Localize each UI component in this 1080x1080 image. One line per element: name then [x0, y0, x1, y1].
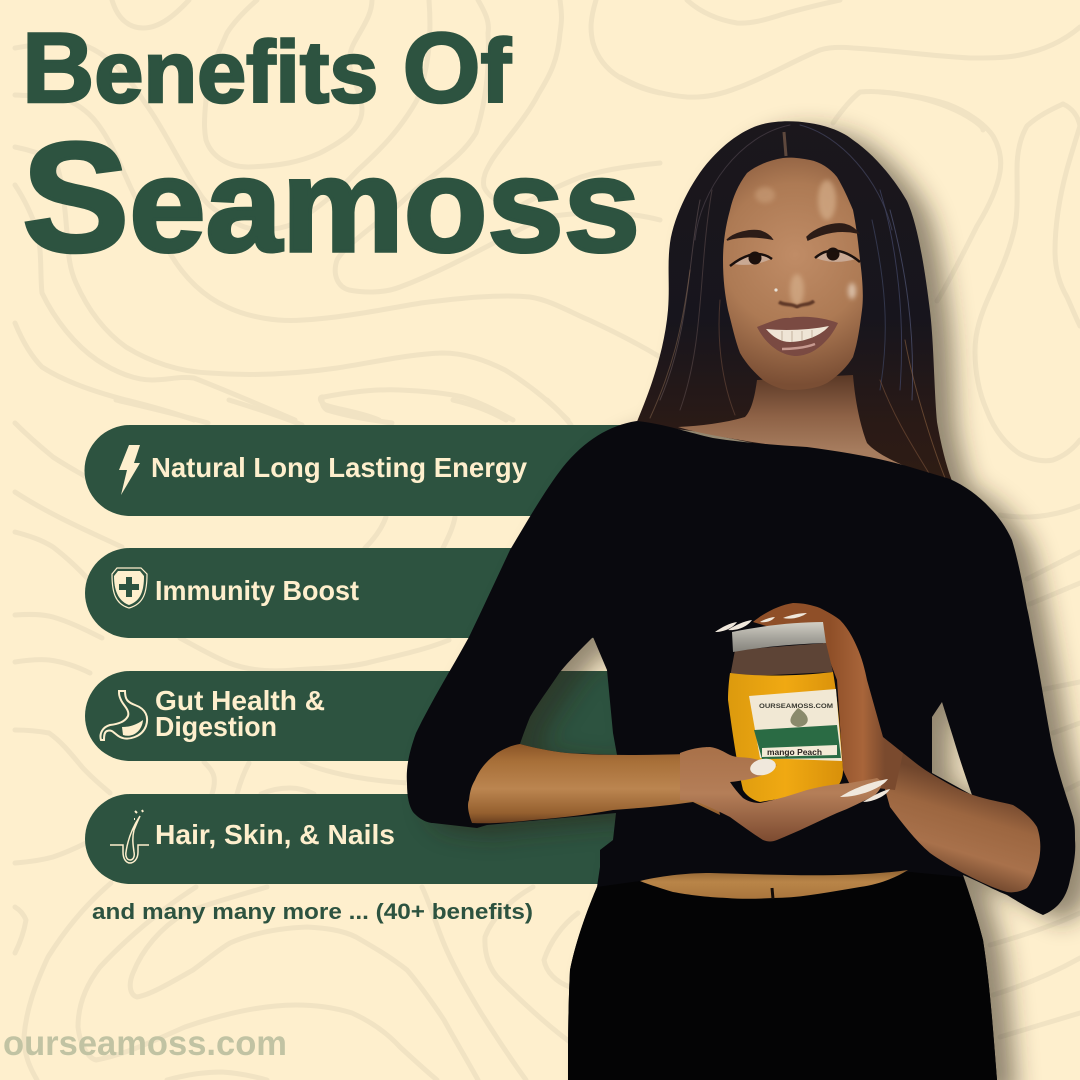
trousers dark fill: [568, 872, 997, 1080]
footnote: and many many more ... (40+ benefits): [92, 899, 533, 924]
icon: stomach: [100, 691, 147, 740]
jar lid: [732, 622, 826, 652]
eyes: [730, 248, 860, 266]
icon: shield: [112, 568, 147, 608]
jar contents: [728, 672, 843, 802]
label: immunity: Immunity Boost: [155, 575, 359, 606]
neck and chest: [678, 375, 910, 468]
person shadow: [427, 129, 1080, 1080]
benefit pills: [84, 425, 630, 884]
fingernails: [715, 613, 890, 802]
icon: lightning bolt: [119, 445, 140, 495]
label: gut health: Gut Health &: [155, 685, 325, 716]
title: Seamoss: [22, 111, 640, 285]
bare midriff: [640, 870, 908, 899]
label: gut health: Digestion: [155, 711, 277, 742]
hair back: [636, 121, 952, 481]
hair strands: [650, 125, 945, 478]
pill: gut: [85, 671, 630, 761]
jar label: OURSEAMOSS.COM: [759, 703, 833, 710]
watermark url: ourseamoss.com: [3, 1024, 287, 1063]
face: [723, 158, 863, 390]
left forearm: [468, 744, 720, 823]
face highlights: [755, 180, 856, 306]
title: [22, 12, 640, 285]
nose: [774, 288, 814, 307]
label: gut health: [155, 685, 325, 742]
pill: hair: [85, 794, 630, 884]
jar label: [749, 689, 842, 761]
jar label: mango Peach: [767, 748, 822, 757]
mouth: [757, 317, 838, 356]
pill: energy: [84, 425, 630, 516]
right forearm: [860, 700, 1040, 892]
hair part: [784, 132, 786, 156]
jar glass: [730, 643, 833, 677]
person: [407, 121, 1075, 1080]
eyebrows: [727, 224, 858, 240]
label: energy: Natural Long Lasting Energy: [151, 452, 527, 483]
right hand behind jar: [753, 603, 903, 790]
title: Benefits Of: [22, 12, 512, 123]
label: hair skin nails: Hair, Skin, & Nails: [155, 819, 395, 850]
lower hand: [680, 747, 881, 842]
pill: immunity: [85, 548, 630, 638]
jar: [728, 622, 843, 802]
black top and trousers: [407, 421, 1075, 1080]
icon: hair follicle: [110, 810, 149, 863]
